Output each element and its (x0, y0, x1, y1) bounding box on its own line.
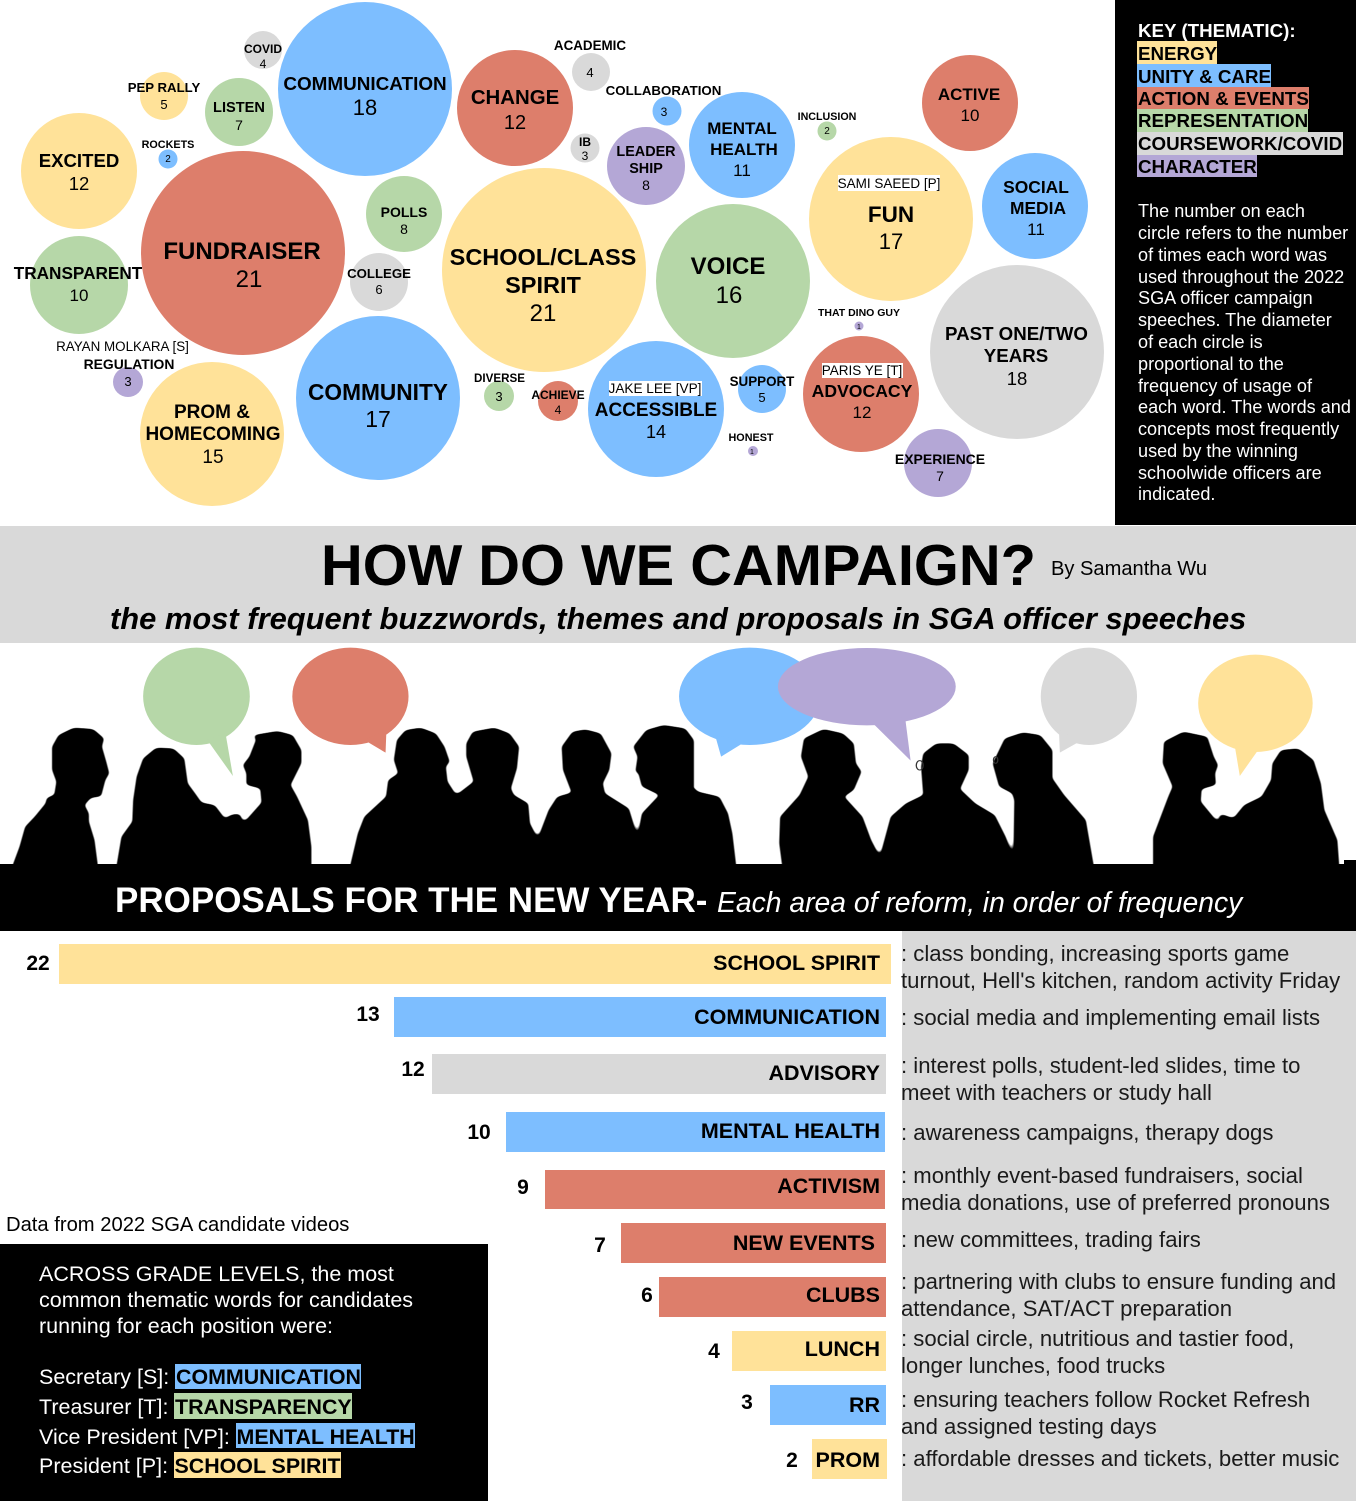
bar: new events 7: 7 (594, 1234, 606, 1257)
bubble: regulation 3 with winning officer label: 3 (124, 374, 132, 389)
bubble: mental health 11: HEALTH (710, 140, 778, 159)
bubble: pep rally 5: PEP RALLY (128, 80, 200, 95)
intro text: running for each position were: (39, 1314, 333, 1338)
bubble: past one/two years 18: PAST ONE/TWO (945, 323, 1088, 344)
bubble: experience 7 (895, 429, 985, 497)
explanation text (1138, 201, 1351, 504)
bubble: collaboration 3 (606, 83, 721, 126)
bubble: academic 4 (554, 38, 626, 91)
silhouette: woman and man (116, 731, 311, 870)
bubble: fun 17 with winning officer label: SAMI SAEED [P] (838, 176, 940, 191)
bubble: ib 3: 3 (582, 149, 589, 163)
bubble: social media 11: MEDIA (1010, 198, 1066, 218)
silhouette: group of three (349, 725, 694, 870)
bubble: fun 17 with winning officer label: FUN (868, 202, 914, 227)
proposal descriptions text: : awareness campaigns, therapy dogs (901, 1120, 1273, 1145)
proposal descriptions text (901, 941, 1341, 1471)
explanation text: each word. The words and (1138, 397, 1351, 417)
bar: school spirit 22 (26, 944, 891, 984)
row: treasurer (39, 1393, 352, 1419)
byline: By Samantha Wu (1051, 558, 1207, 580)
row: secretary (39, 1364, 361, 1389)
bubble: fundraiser 21: 21 (236, 266, 262, 293)
row: secretary: COMMUNICATION (176, 1365, 361, 1389)
bubble: leadership 8: 8 (642, 177, 650, 193)
intro text (39, 1262, 413, 1338)
explanation text: circle refers to the number (1138, 223, 1348, 243)
row: treasurer: TRANSPARENCY (175, 1395, 352, 1419)
proposal descriptions text: : new committees, trading fairs (901, 1227, 1201, 1252)
bubble: social media 11: SOCIAL (1003, 177, 1069, 197)
bar: lunch 4 (708, 1331, 886, 1371)
title band (0, 526, 1356, 643)
bar chart: proposals by frequency (26, 944, 891, 1479)
speech bubble: blue (679, 648, 820, 757)
bubble: regulation 3 with winning officer label: RAYAN MOLKARA [S] (56, 339, 189, 354)
bubble: support 5: SUPPORT (730, 374, 795, 389)
proposal descriptions text: : social circle, nutritious and tastier food, (901, 1326, 1294, 1351)
proposals header band (0, 860, 1356, 931)
bubble: social media 11: 11 (1027, 220, 1045, 239)
bubble: honest 1: HONEST (728, 432, 774, 444)
bubble: accessible 14 with winning officer label (588, 341, 724, 477)
bubble: polls 8: 8 (400, 221, 408, 237)
bubble: past one/two years 18: YEARS (984, 345, 1048, 366)
bubble: leadership 8: SHIP (629, 161, 663, 177)
bubble: inclusion 2: INCLUSION (798, 111, 856, 123)
explanation text: frequency of usage of (1138, 376, 1313, 396)
bubble: college 6 (347, 253, 411, 311)
bubble: past one/two years 18 (930, 265, 1104, 439)
bubble: ib 3: IB (579, 135, 591, 149)
bubble: academic 4: 4 (586, 65, 594, 80)
bar: rr 3: RR (849, 1393, 880, 1417)
bar: activism 9 (517, 1170, 885, 1209)
bubble: voice 16 (656, 204, 810, 358)
explanation text: schoolwide officers are (1138, 463, 1322, 483)
bar: communication 13: COMMUNICATION (694, 1005, 880, 1029)
bubble: transparent 10: 10 (70, 286, 88, 305)
bubble: transparent 10: TRANSPARENT (14, 263, 143, 283)
bubble: change 12 (457, 50, 573, 166)
bubble: prom and homecoming 15: 15 (202, 447, 224, 468)
bubble: honest 1 (728, 432, 774, 456)
bubble: inclusion 2: 2 (824, 126, 830, 137)
silhouette glasses (916, 757, 998, 770)
bubble: accessible 14 with winning officer label: ACCESSIBLE (595, 400, 717, 421)
bubble: diverse 3 (474, 372, 525, 411)
proposal descriptions text: media donations, use of preferred pronouns (901, 1190, 1330, 1215)
bubble: school/class spirit 21: SCHOOL/CLASS (450, 244, 636, 270)
panel: key and explanation (1115, 0, 1356, 525)
proposal descriptions text: : affordable dresses and tickets, better music (901, 1446, 1339, 1471)
bar: new events 7 (594, 1223, 886, 1263)
bubble: covid 4: 4 (260, 57, 267, 71)
explanation text: used throughout the 2022 (1138, 267, 1344, 287)
subtitle: the most frequent buzzwords, themes and proposals in SGA officer speeches (110, 601, 1246, 636)
bar: clubs 6: CLUBS (806, 1283, 880, 1307)
bubble: prom and homecoming 15: HOMECOMING (145, 424, 281, 445)
row: president: President [P]: (39, 1454, 168, 1478)
key heading: KEY (THEMATIC): (1138, 20, 1296, 41)
bubble: polls 8: POLLS (381, 204, 427, 220)
group: right half of the crowd and bubbles (663, 648, 1340, 870)
key item: character: CHARACTER (1138, 156, 1257, 177)
speech bubble: yellow (1198, 655, 1313, 776)
proposal descriptions text: : partnering with clubs to ensure funding and (901, 1269, 1336, 1294)
bubble: experience 7: 7 (936, 468, 944, 484)
bubble: support 5: 5 (758, 390, 766, 405)
silhouette: three men (779, 729, 1095, 870)
explanation text: speeches. The diameter (1138, 310, 1332, 330)
bar: mental health 10 (467, 1112, 885, 1152)
bubble: academic 4: ACADEMIC (554, 38, 626, 53)
bar: prom 2: 2 (786, 1449, 798, 1472)
bubble: that dino guy 1: THAT DINO GUY (818, 307, 900, 319)
bubble: rockets 2: ROCKETS (142, 139, 194, 151)
silhouette: man and woman (1153, 732, 1340, 870)
bubble: that dino guy 1 (818, 307, 900, 331)
bar: advisory 12: ADVISORY (768, 1061, 880, 1085)
silhouette: man at far left of group (663, 728, 737, 870)
proposal descriptions text: : class bonding, increasing sports game (901, 941, 1289, 966)
bubble: advocacy 12 with winning officer label (803, 336, 919, 452)
bar: clubs 6 (641, 1277, 886, 1317)
explanation text: used by the winning (1138, 441, 1298, 461)
bar: mental health 10: 10 (467, 1121, 491, 1144)
bubble: achieve 4: 4 (555, 403, 562, 417)
bubble: listen 7: 7 (235, 117, 243, 133)
explanation text: concepts most frequently (1138, 419, 1340, 439)
bubble: pep rally 5 (128, 72, 200, 120)
proposal descriptions text: longer lunches, food trucks (901, 1353, 1165, 1378)
bar: activism 9: 9 (517, 1176, 529, 1199)
row: vice president (39, 1423, 415, 1449)
proposal descriptions text: : social media and implementing email lists (901, 1005, 1320, 1030)
bubble: listen 7: LISTEN (213, 100, 265, 116)
proposals subheading: Each area of reform, in order of frequency (717, 886, 1244, 918)
group: left half of the crowd and bubbles (11, 648, 694, 870)
bubble: mental health 11: MENTAL (707, 119, 777, 138)
explanation text: SGA officer campaign (1138, 288, 1313, 308)
row: president (39, 1452, 341, 1478)
bubble: excited 12 (21, 113, 137, 229)
explanation text: of times each word was (1138, 245, 1327, 265)
bubble: communication 18: 18 (353, 95, 377, 120)
bar: lunch 4: LUNCH (805, 1337, 880, 1361)
key item: representation: REPRESENTATION (1138, 110, 1308, 131)
key item: unity and care: UNITY & CARE (1138, 66, 1271, 87)
bubble: honest 1: 1 (750, 449, 754, 456)
bubble: rockets 2 (142, 139, 194, 168)
bubble: mental health 11 (689, 92, 795, 198)
bar: school spirit 22: 22 (26, 952, 50, 975)
panel: across grade levels (0, 1244, 488, 1501)
bubble: college 6: 6 (375, 282, 383, 297)
bubble: achieve 4 (531, 381, 585, 421)
bar: clubs 6: 6 (641, 1284, 653, 1307)
proposal descriptions text: : interest polls, student-led slides, time to (901, 1053, 1300, 1078)
bubble: fun 17 with winning officer label (809, 137, 973, 301)
explanation text: of each circle is (1138, 332, 1263, 352)
intro text: common thematic words for candidates (39, 1288, 413, 1312)
bar: lunch 4: 4 (708, 1340, 720, 1363)
explanation text: The number on each (1138, 201, 1305, 221)
bubble: collaboration 3: COLLABORATION (606, 83, 721, 98)
proposal descriptions text: meet with teachers or study hall (901, 1080, 1212, 1105)
bubble: achieve 4: ACHIEVE (531, 388, 585, 402)
speech bubbles and silhouettes illustration (11, 648, 1340, 870)
bubble: rockets 2: 2 (165, 154, 171, 165)
bubble: school/class spirit 21: SPIRIT (505, 272, 582, 298)
proposal descriptions text: and assigned testing days (901, 1414, 1157, 1439)
bubble: experience 7: EXPERIENCE (895, 451, 985, 467)
bubble: change 12: 12 (504, 112, 526, 134)
bar: new events 7: NEW EVENTS (733, 1231, 875, 1255)
bubble: social media 11 (982, 153, 1088, 259)
bar: communication 13: 13 (356, 1003, 380, 1026)
bubble: advocacy 12 with winning officer label: PARIS YE [T] (822, 363, 902, 378)
row: vice president: MENTAL HEALTH (236, 1425, 415, 1449)
bubble: diverse 3: DIVERSE (474, 372, 525, 385)
bubble: change 12: CHANGE (471, 87, 559, 109)
bar: advisory 12 (401, 1054, 886, 1094)
intro text: ACROSS GRADE LEVELS, the most (39, 1262, 394, 1286)
bubble: active 10 (922, 55, 1018, 151)
bubble: excited 12: 12 (69, 173, 89, 194)
row: treasurer: Treasurer [T]: (39, 1395, 168, 1419)
bubble: fundraiser 21: FUNDRAISER (163, 238, 321, 265)
bubble: covid 4 (244, 31, 282, 71)
key item: coursework/covid: COURSEWORK/COVID (1138, 133, 1342, 154)
proposal descriptions text: : monthly event-based fundraisers, social (901, 1163, 1303, 1188)
row: vice president: Vice President [VP]: (39, 1425, 230, 1449)
row: secretary: Secretary [S]: (39, 1365, 169, 1389)
bubble: community 17: 17 (365, 406, 391, 432)
bubble: communication 18 (278, 2, 452, 176)
row: president: SCHOOL SPIRIT (174, 1454, 340, 1478)
bar: activism 9: ACTIVISM (777, 1174, 880, 1198)
bubble: pep rally 5: 5 (160, 97, 168, 112)
bubble: college 6: COLLEGE (347, 266, 411, 281)
explanation text: indicated. (1138, 484, 1215, 504)
bubble: school/class spirit 21 (442, 168, 646, 372)
bubble: school/class spirit 21: 21 (530, 300, 556, 327)
bubble: that dino guy 1: 1 (857, 324, 861, 331)
speech bubble: green (143, 648, 250, 776)
main title: HOW DO WE CAMPAIGN? (321, 534, 1036, 598)
bubble: polls 8 (366, 176, 442, 252)
bar: rr 3: 3 (741, 1391, 753, 1414)
bubble: covid 4: COVID (244, 42, 282, 56)
bubble: diverse 3: 3 (495, 389, 503, 404)
bubble: transparent 10 (14, 236, 143, 334)
bubble: mental health 11: 11 (733, 161, 751, 180)
bubble: accessible 14 with winning officer label: 14 (646, 422, 666, 442)
bubble: advocacy 12 with winning officer label: ADVOCACY (812, 381, 913, 401)
data source note: Data from 2022 SGA candidate videos (6, 1214, 349, 1236)
bubble: support 5 (730, 365, 795, 413)
bubble: fundraiser 21 (141, 151, 345, 355)
bubble: voice 16: 16 (716, 282, 742, 309)
speech bubble: red (292, 648, 409, 753)
bubble: communication 18: COMMUNICATION (283, 74, 447, 95)
panel: proposal descriptions background (902, 931, 1356, 1501)
key item: energy: ENERGY (1138, 43, 1218, 64)
bubble: active 10: 10 (961, 106, 979, 125)
bubble: leadership 8 (607, 127, 685, 205)
bubble: prom and homecoming 15 (140, 362, 284, 506)
bubble: accessible 14 with winning officer label: JAKE LEE [VP] (609, 381, 701, 396)
bubble: regulation 3 with winning officer label: REGULATION (84, 356, 174, 372)
proposal descriptions text: turnout, Hell's kitchen, random activity Friday (901, 968, 1341, 993)
panel: word frequency bubble chart (14, 2, 1104, 506)
bubble: advocacy 12 with winning officer label: 12 (853, 403, 871, 422)
bubble: past one/two years 18: 18 (1007, 368, 1027, 389)
bubble: fun 17 with winning officer label: 17 (879, 229, 903, 254)
bar: rr 3 (741, 1385, 886, 1425)
bubble: prom and homecoming 15: PROM & (174, 402, 250, 423)
bar: advisory 12: 12 (401, 1058, 425, 1081)
bubble: community 17: COMMUNITY (308, 379, 448, 405)
bubble: ib 3 (570, 134, 600, 163)
bar: school spirit 22: SCHOOL SPIRIT (713, 951, 880, 975)
bar: prom 2: PROM (816, 1448, 880, 1472)
bar: mental health 10: MENTAL HEALTH (701, 1119, 880, 1143)
bubble: community 17 (296, 316, 460, 480)
bubble: active 10: ACTIVE (938, 85, 1000, 104)
bubble: voice 16: VOICE (691, 253, 765, 280)
silhouette: man with glasses (11, 728, 109, 870)
proposal descriptions text: attendance, SAT/ACT preparation (901, 1296, 1232, 1321)
key item: action and events: ACTION & EVENTS (1138, 88, 1309, 109)
bubble: excited 12: EXCITED (39, 150, 119, 171)
explanation text: proportional to the (1138, 354, 1284, 374)
speech bubble: purple (778, 648, 956, 761)
bar: communication 13 (356, 997, 886, 1037)
bubble: leadership 8: LEADER (616, 144, 676, 160)
speech bubble: grey (1041, 648, 1137, 753)
bar: prom 2 (786, 1439, 887, 1479)
bubble: regulation 3 with winning officer label (56, 339, 189, 397)
bubble: inclusion 2 (798, 111, 856, 140)
bubble: collaboration 3: 3 (661, 105, 668, 119)
bubble: listen 7 (205, 78, 273, 146)
proposals heading: PROPOSALS FOR THE NEW YEAR- (115, 881, 707, 920)
proposal descriptions text: : ensuring teachers follow Rocket Refresh (901, 1387, 1310, 1412)
